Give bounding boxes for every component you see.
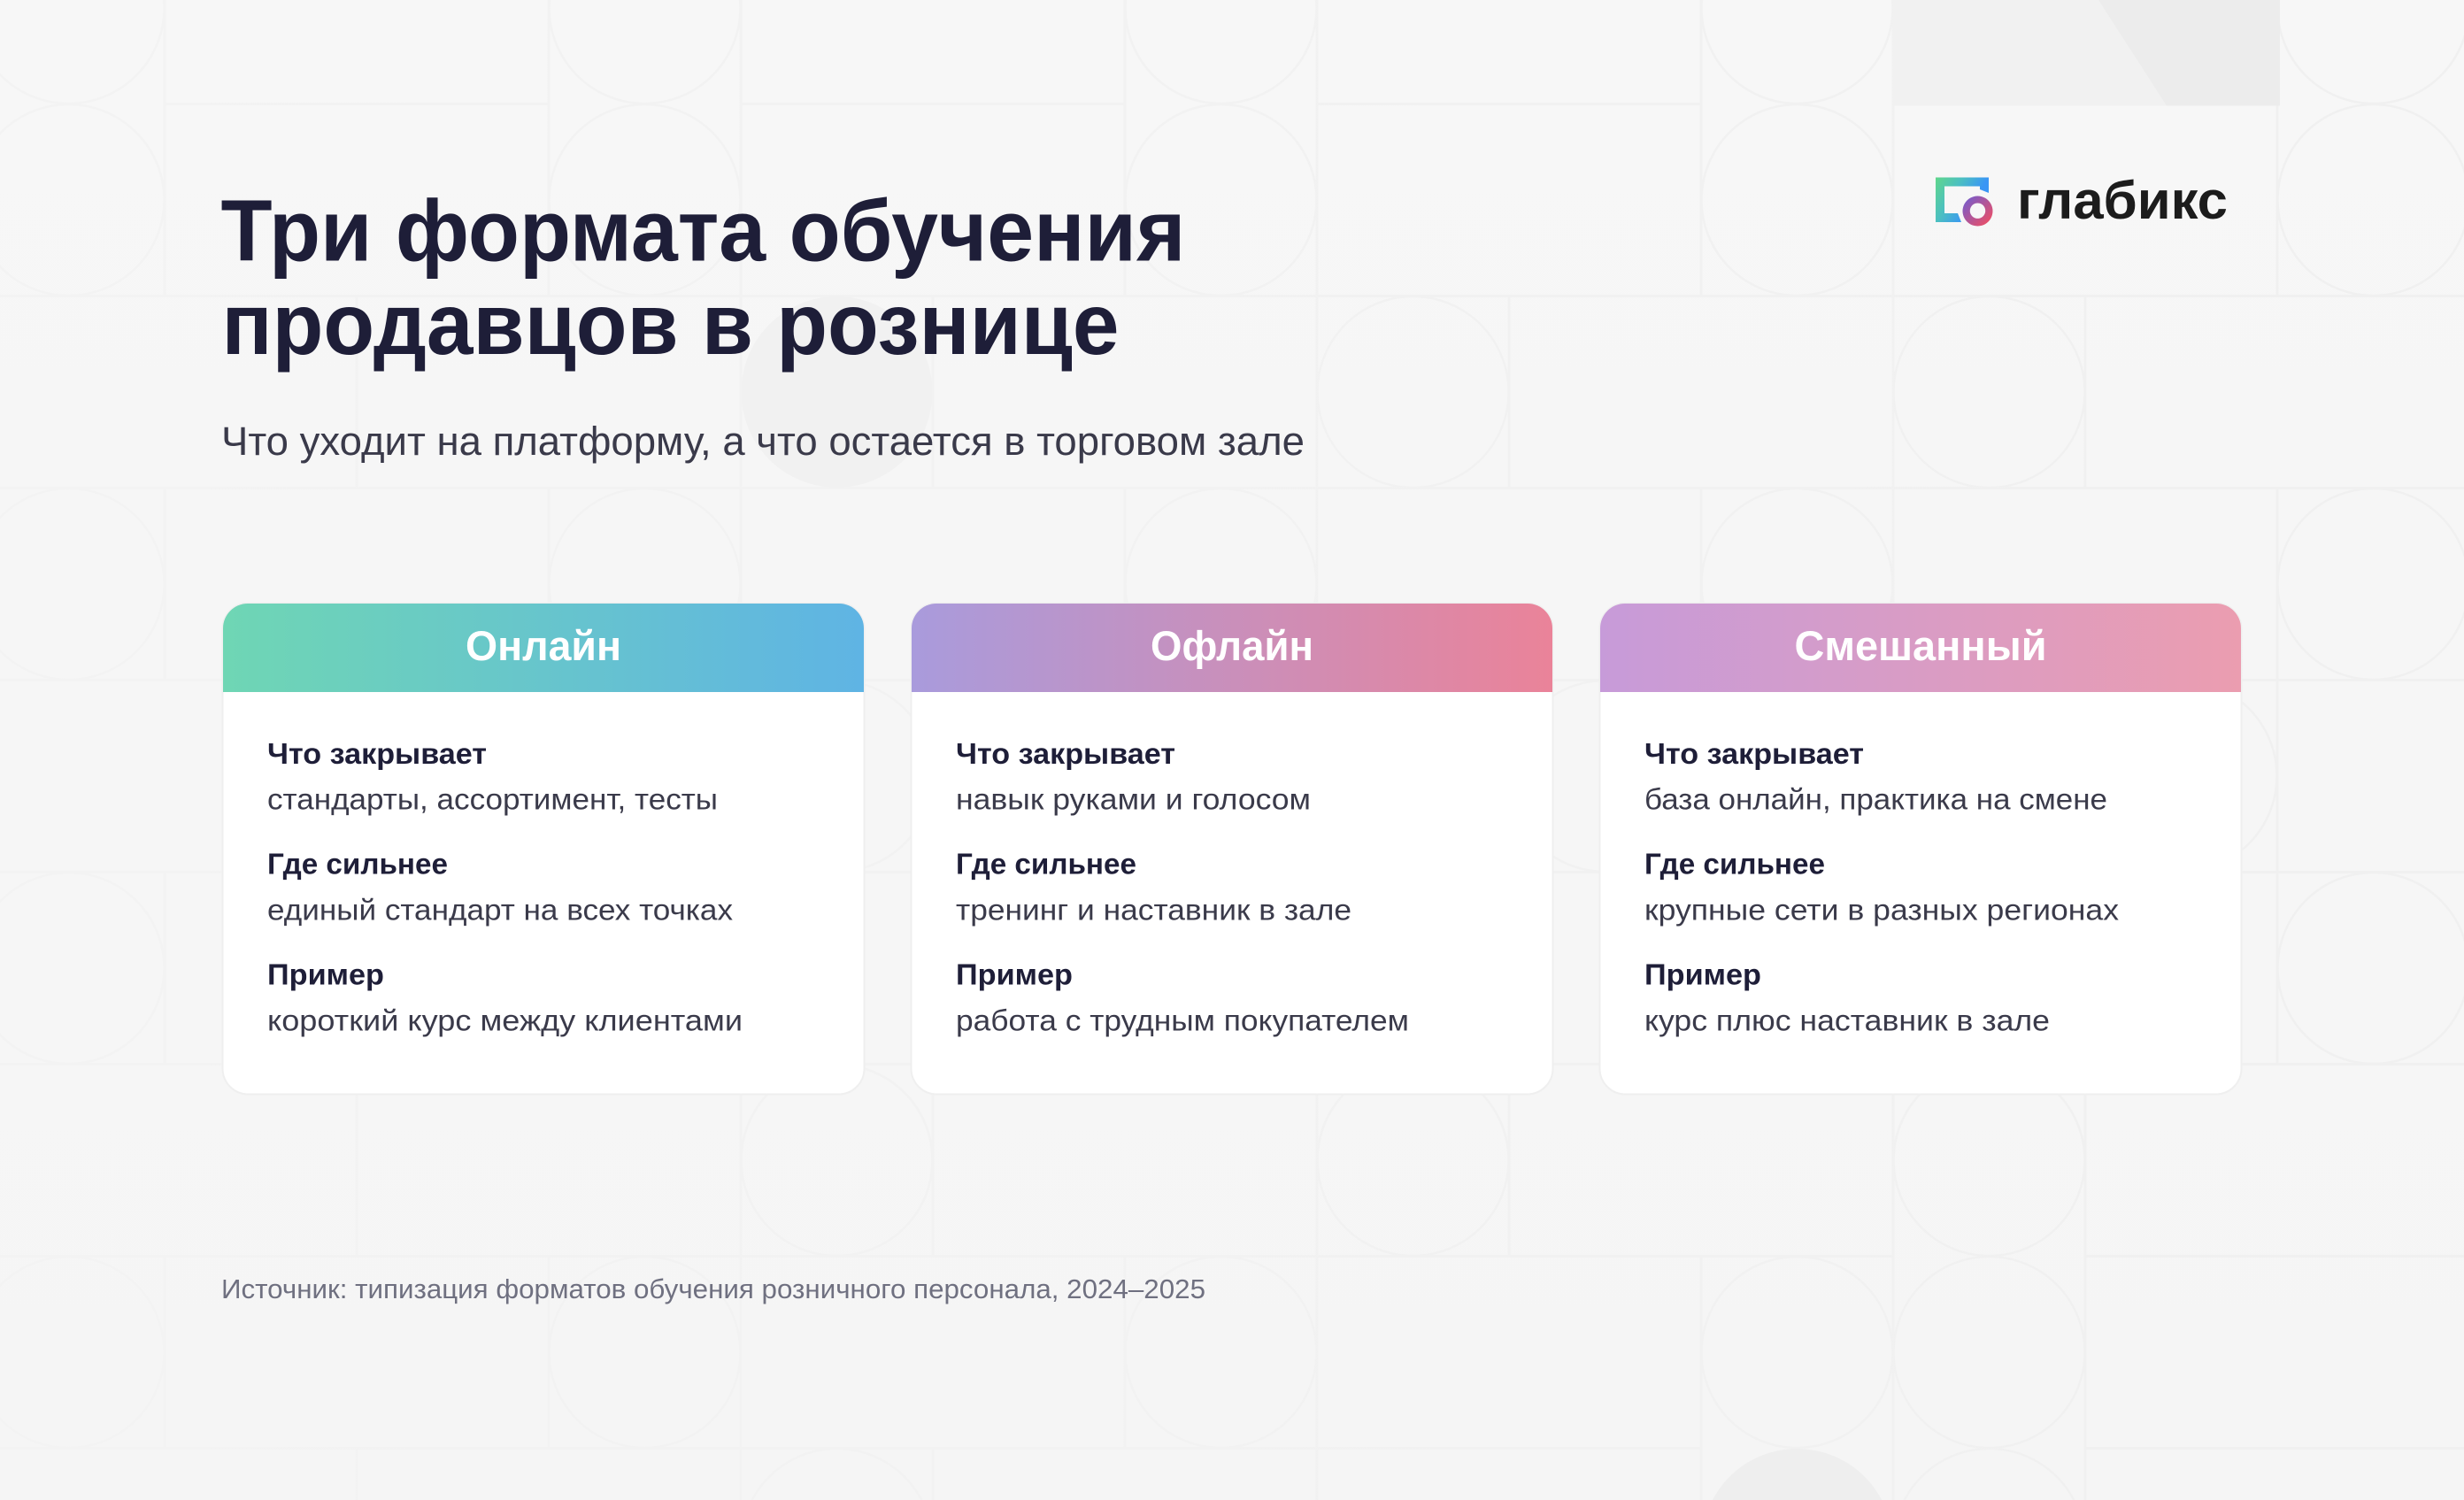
title: продавцов в рознице <box>221 275 1119 373</box>
text: что закрывает: стандарты, ассортимент, тесты <box>267 782 718 816</box>
header: Офлайн: Офлайн <box>1151 622 1313 669</box>
header: Смешанный <box>1600 604 2241 692</box>
text: пример: курс плюс наставник в зале <box>1644 1004 2050 1037</box>
subtitle: Что уходит на платформу, а что остается в торговом зале <box>221 419 1305 464</box>
text: где сильнее: крупные сети в разных регионах <box>1644 894 2120 926</box>
text: что закрывает: Что закрывает <box>267 737 487 770</box>
logo wordmark: глабикс <box>2017 171 2228 230</box>
logo: глабикс <box>1936 171 2228 230</box>
text: где сильнее <box>1644 848 2120 926</box>
text: пример <box>1644 958 2050 1037</box>
source note: Источник: типизация форматов обучения розничного персонала, 2024–2025 <box>221 1273 1205 1304</box>
title: Три формата обучения <box>221 182 1186 280</box>
text: что закрывает: Что закрывает <box>956 737 1175 770</box>
header: Смешанный: Смешанный <box>1795 622 2046 669</box>
header: Онлайн <box>223 604 864 692</box>
icon: logo mark <box>1936 177 1992 227</box>
text: пример: Пример <box>267 958 384 991</box>
panel: Онлайн <box>223 604 864 1094</box>
text: пример: Пример <box>956 958 1073 991</box>
header: Онлайн: Онлайн <box>466 622 621 669</box>
text: что закрывает <box>956 737 1311 816</box>
text: где сильнее: Где сильнее <box>267 848 448 880</box>
text: пример: Пример <box>1644 958 1761 991</box>
panel: Офлайн <box>912 604 1552 1094</box>
text: что закрывает <box>267 737 718 816</box>
text: что закрывает: навык руками и голосом <box>956 782 1311 816</box>
text: где сильнее <box>956 848 1351 926</box>
text: что закрывает <box>1644 737 2107 816</box>
text: где сильнее: Где сильнее <box>956 848 1136 880</box>
text: что закрывает: Что закрывает <box>1644 737 1864 770</box>
title <box>221 182 1186 373</box>
text: где сильнее: Где сильнее <box>1644 848 1825 880</box>
panel: Смешанный <box>1600 604 2241 1094</box>
text: что закрывает: база онлайн, практика на смене <box>1644 782 2107 816</box>
text: пример: работа с трудным покупателем <box>956 1004 1409 1037</box>
text: пример <box>956 958 1409 1037</box>
text: где сильнее: тренинг и наставник в зале <box>956 894 1351 926</box>
text: пример <box>267 958 743 1037</box>
text: где сильнее <box>267 848 734 926</box>
header: Офлайн <box>912 604 1552 692</box>
text: где сильнее: единый стандарт на всех точках <box>267 894 734 926</box>
text: пример: короткий курс между клиентами <box>267 1004 743 1037</box>
